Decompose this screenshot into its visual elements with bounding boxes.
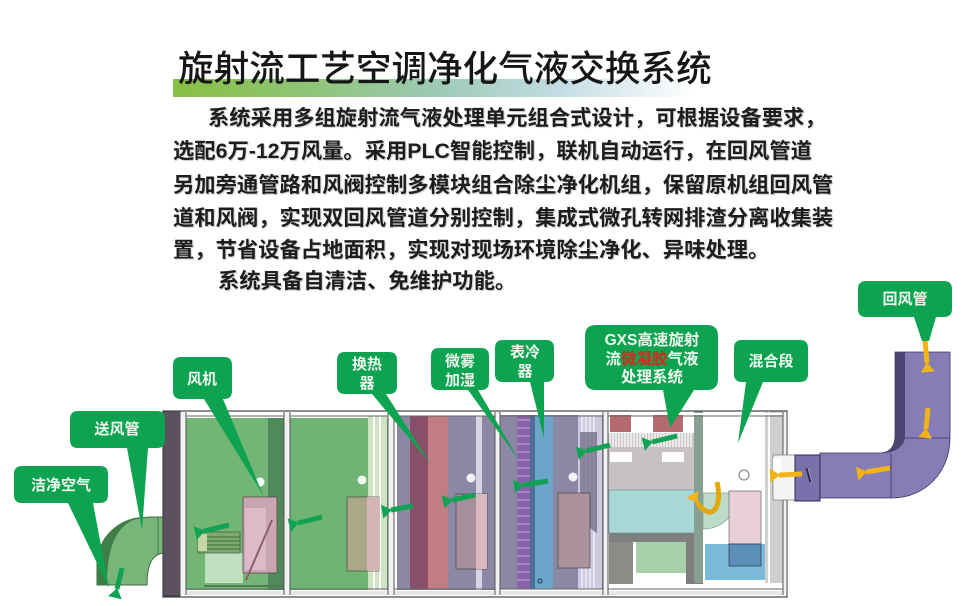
callout: GXS system: 流微凝胶气液 bbox=[605, 349, 699, 368]
panel: fan section bbox=[186, 416, 388, 590]
callout: supply duct: 送风管 bbox=[94, 420, 140, 438]
callout: micro-mist humidifier: 微雾 bbox=[445, 352, 475, 370]
body text block: 系统采用多组旋射流气液处理单元组合式设计，可根据设备要求， bbox=[208, 106, 826, 130]
supply air duct elbow bbox=[97, 510, 177, 585]
unit end panel bbox=[163, 411, 180, 596]
return air duct bbox=[773, 352, 950, 501]
icon: fan and motor bbox=[198, 497, 288, 587]
yellow air flow arrows bbox=[697, 340, 928, 512]
body text block: 置，节省设备占地面积，实现对现场环境除尘净化、异味处理。 bbox=[173, 238, 769, 262]
green air flow arrows bbox=[117, 436, 677, 589]
unit frame bbox=[163, 411, 787, 597]
body text block: 另加旁通管路和风阀控制多模块组合除尘净化机组，保留原机组回风管 bbox=[173, 173, 833, 197]
callout: micro-mist humidifier: 加湿 bbox=[445, 372, 475, 389]
panel: humidifier and cooling coil section bbox=[500, 415, 603, 589]
callout: GXS system: GXS高速旋射 bbox=[605, 330, 699, 349]
body text block bbox=[173, 106, 834, 293]
callout: clean air: 洁净空气 bbox=[31, 476, 91, 494]
callout: mixing section bbox=[734, 340, 808, 443]
callout: heat exchanger: 换热 bbox=[352, 356, 382, 373]
callout: mixing section: 混合段 bbox=[748, 352, 794, 370]
callout: supply duct bbox=[70, 411, 165, 530]
title: 旋射流工艺空调净化气液交换系统 bbox=[178, 41, 712, 92]
callout: fan: 风机 bbox=[187, 371, 217, 388]
callout: surface cooler: 表冷 bbox=[510, 343, 540, 361]
callout: heat exchanger: 器 bbox=[359, 375, 375, 392]
callout: surface cooler: 器 bbox=[517, 363, 533, 380]
body text block: 选配6万-12万风量。采用PLC智能控制，联机自动运行，在回风管道 bbox=[173, 139, 812, 163]
panel: mixing section bbox=[703, 411, 786, 583]
callout: heat exchanger bbox=[337, 352, 430, 463]
callout: GXS system bbox=[585, 325, 718, 428]
body text block: 道和风阀，实现双回风管道分别控制，集成式微孔转网排渣分离收集装 bbox=[173, 206, 833, 230]
panel: GXS processing section bbox=[608, 411, 703, 584]
body text block: 系统具备自清洁、免维护功能。 bbox=[218, 269, 516, 293]
callout: micro-mist humidifier bbox=[431, 348, 519, 460]
callout: return air duct: 回风管 bbox=[882, 290, 928, 308]
callout: clean air bbox=[14, 466, 109, 588]
heading highlight bar bbox=[173, 79, 693, 97]
callout: GXS system: 处理系统 bbox=[621, 367, 683, 386]
panel: heat exchanger section bbox=[397, 416, 495, 590]
callout: return air duct bbox=[858, 281, 952, 341]
callout: fan bbox=[173, 357, 263, 495]
callout: surface cooler bbox=[495, 340, 554, 438]
